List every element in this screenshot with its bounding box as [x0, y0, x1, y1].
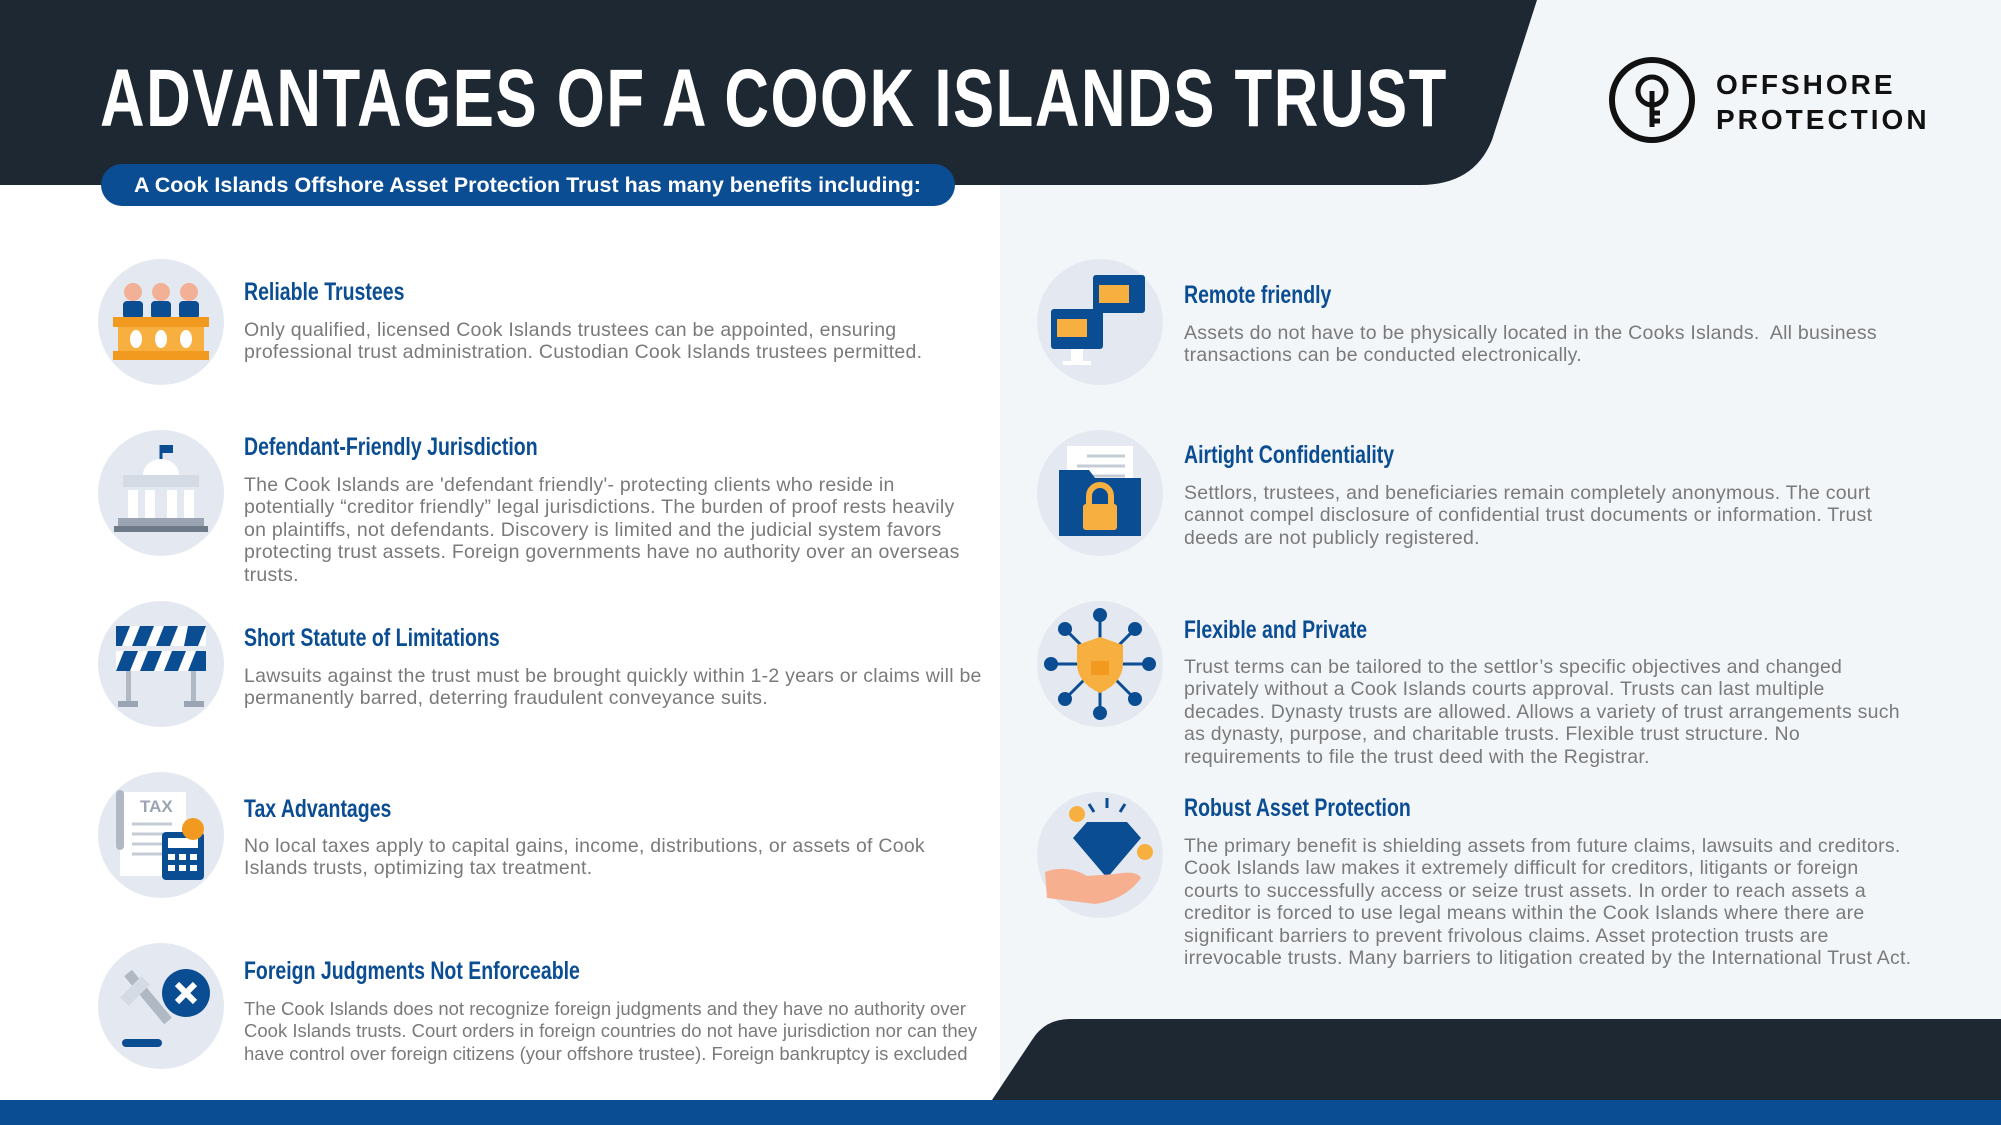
icon: shield network	[1037, 601, 1163, 727]
icon: tax document: TAX	[140, 797, 173, 816]
body	[244, 319, 922, 363]
heading: Foreign Judgments Not Enforceable	[244, 957, 580, 985]
body: trusts.	[244, 564, 299, 586]
body: protecting trust assets. Foreign governments have no authority over an overseas	[244, 541, 960, 563]
body: No local taxes apply to capital gains, income, distributions, or assets of Cook	[244, 835, 925, 857]
body: significant barriers to prevent frivolous claims. Asset protection trusts are	[1184, 925, 1829, 947]
icon: hand with diamond	[1037, 792, 1163, 918]
body	[1184, 656, 1900, 768]
body: creditor is forced to use legal means within the Cook Islands where there are	[1184, 902, 1864, 924]
body: Assets do not have to be physically located in the Cooks Islands. All business	[1184, 322, 1877, 344]
icon: barrier	[98, 601, 224, 727]
body: permanently barred, deterring fraudulent conveyance suits.	[244, 687, 768, 709]
body: Cook Islands law makes it extremely difficult for creditors, litigants or foreign	[1184, 857, 1858, 879]
item: Foreign Judgments Not Enforceable	[98, 943, 977, 1069]
body: potentially “creditor friendly” legal jurisdictions. The burden of proof rests heavily	[244, 496, 954, 518]
item: Short Statute of Limitations	[98, 601, 982, 727]
body: Only qualified, licensed Cook Islands trustees can be appointed, ensuring	[244, 319, 896, 341]
body: Lawsuits against the trust must be brought quickly within 1-2 years or claims will be	[244, 665, 982, 687]
heading: Robust Asset Protection	[1184, 794, 1411, 822]
title: ADVANTAGES OF A COOK ISLANDS TRUST	[100, 53, 1448, 144]
body: The primary benefit is shielding assets from future claims, lawsuits and creditors.	[1184, 835, 1901, 857]
body: Trust terms can be tailored to the settlor’s specific objectives and changed	[1184, 656, 1842, 678]
item: Flexible and Private	[1037, 601, 1900, 768]
logo text: OFFSHORE	[1716, 69, 1896, 100]
heading: Short Statute of Limitations	[244, 624, 500, 652]
body: as dynasty, purpose, and charitable trusts. Flexible trust structure. No	[1184, 723, 1800, 745]
body: privately without a Cook Islands courts approval. Trusts can last multiple	[1184, 678, 1825, 700]
logo	[1609, 57, 1930, 143]
subtitle pill	[101, 164, 955, 206]
item: Airtight Confidentiality	[1037, 430, 1872, 556]
logo text	[1716, 69, 1930, 135]
heading: Remote friendly	[1184, 281, 1331, 309]
body: decades. Dynasty trusts are allowed. Allows a variety of trust arrangements such	[1184, 701, 1900, 723]
logo icon	[1609, 57, 1695, 143]
item: Defendant-Friendly Jurisdiction	[98, 430, 960, 586]
icon: courthouse	[98, 430, 224, 556]
icon: tax document	[98, 772, 224, 898]
body: professional trust administration. Custodian Cook Islands trustees permitted.	[244, 341, 922, 363]
heading: Airtight Confidentiality	[1184, 441, 1394, 469]
body	[244, 665, 982, 709]
body: transactions can be conducted electronically.	[1184, 344, 1582, 366]
item: Robust Asset Protection	[1037, 792, 1911, 969]
body	[244, 998, 977, 1064]
heading: Defendant-Friendly Jurisdiction	[244, 433, 538, 461]
body	[244, 835, 925, 879]
subtitle pill: A Cook Islands Offshore Asset Protection Trust has many benefits including:	[134, 173, 921, 197]
body: Settlors, trustees, and beneficiaries remain completely anonymous. The court	[1184, 482, 1870, 504]
right background panel	[1000, 0, 2001, 1125]
heading: Tax Advantages	[244, 795, 391, 823]
heading: Flexible and Private	[1184, 616, 1367, 644]
item: Tax Advantages	[98, 772, 925, 898]
body: The Cook Islands does not recognize foreign judgments and they have no authority over	[244, 998, 966, 1019]
body: irrevocable trusts. Many barriers to litigation created by the International Trust Act.	[1184, 947, 1911, 969]
body: requirements to file the trust deed with the Registrar.	[1184, 746, 1650, 768]
item: Reliable Trustees	[98, 259, 922, 385]
item: Remote friendly	[1037, 259, 1877, 385]
body: deeds are not publicly registered.	[1184, 527, 1480, 549]
body	[244, 474, 960, 586]
body: courts to successfully access or seize trust assets. In order to reach assets a	[1184, 880, 1866, 902]
icon: gavel with x	[98, 943, 224, 1069]
body: on plaintiffs, not defendants. Discovery is limited and the judicial system favors	[244, 519, 942, 541]
body	[1184, 322, 1877, 366]
body: Cook Islands trusts. Court orders in foreign countries do not have jurisdiction nor can they	[244, 1020, 977, 1041]
icon: remote screens	[1037, 259, 1163, 385]
body	[1184, 835, 1911, 969]
body: cannot compel disclosure of confidential trust documents or information. Trust	[1184, 504, 1872, 526]
icon: trustees	[98, 259, 224, 385]
body: The Cook Islands are 'defendant friendly'- protecting clients who reside in	[244, 474, 895, 496]
heading: Reliable Trustees	[244, 278, 404, 306]
bottom blue bar	[0, 1100, 2001, 1125]
body: have control over foreign citizens (your offshore trustee). Foreign bankruptcy is excluded	[244, 1043, 968, 1064]
body	[1184, 482, 1872, 549]
icon: locked folder	[1037, 430, 1163, 556]
logo text: PROTECTION	[1716, 104, 1930, 135]
body: Islands trusts, optimizing tax treatment.	[244, 857, 592, 879]
